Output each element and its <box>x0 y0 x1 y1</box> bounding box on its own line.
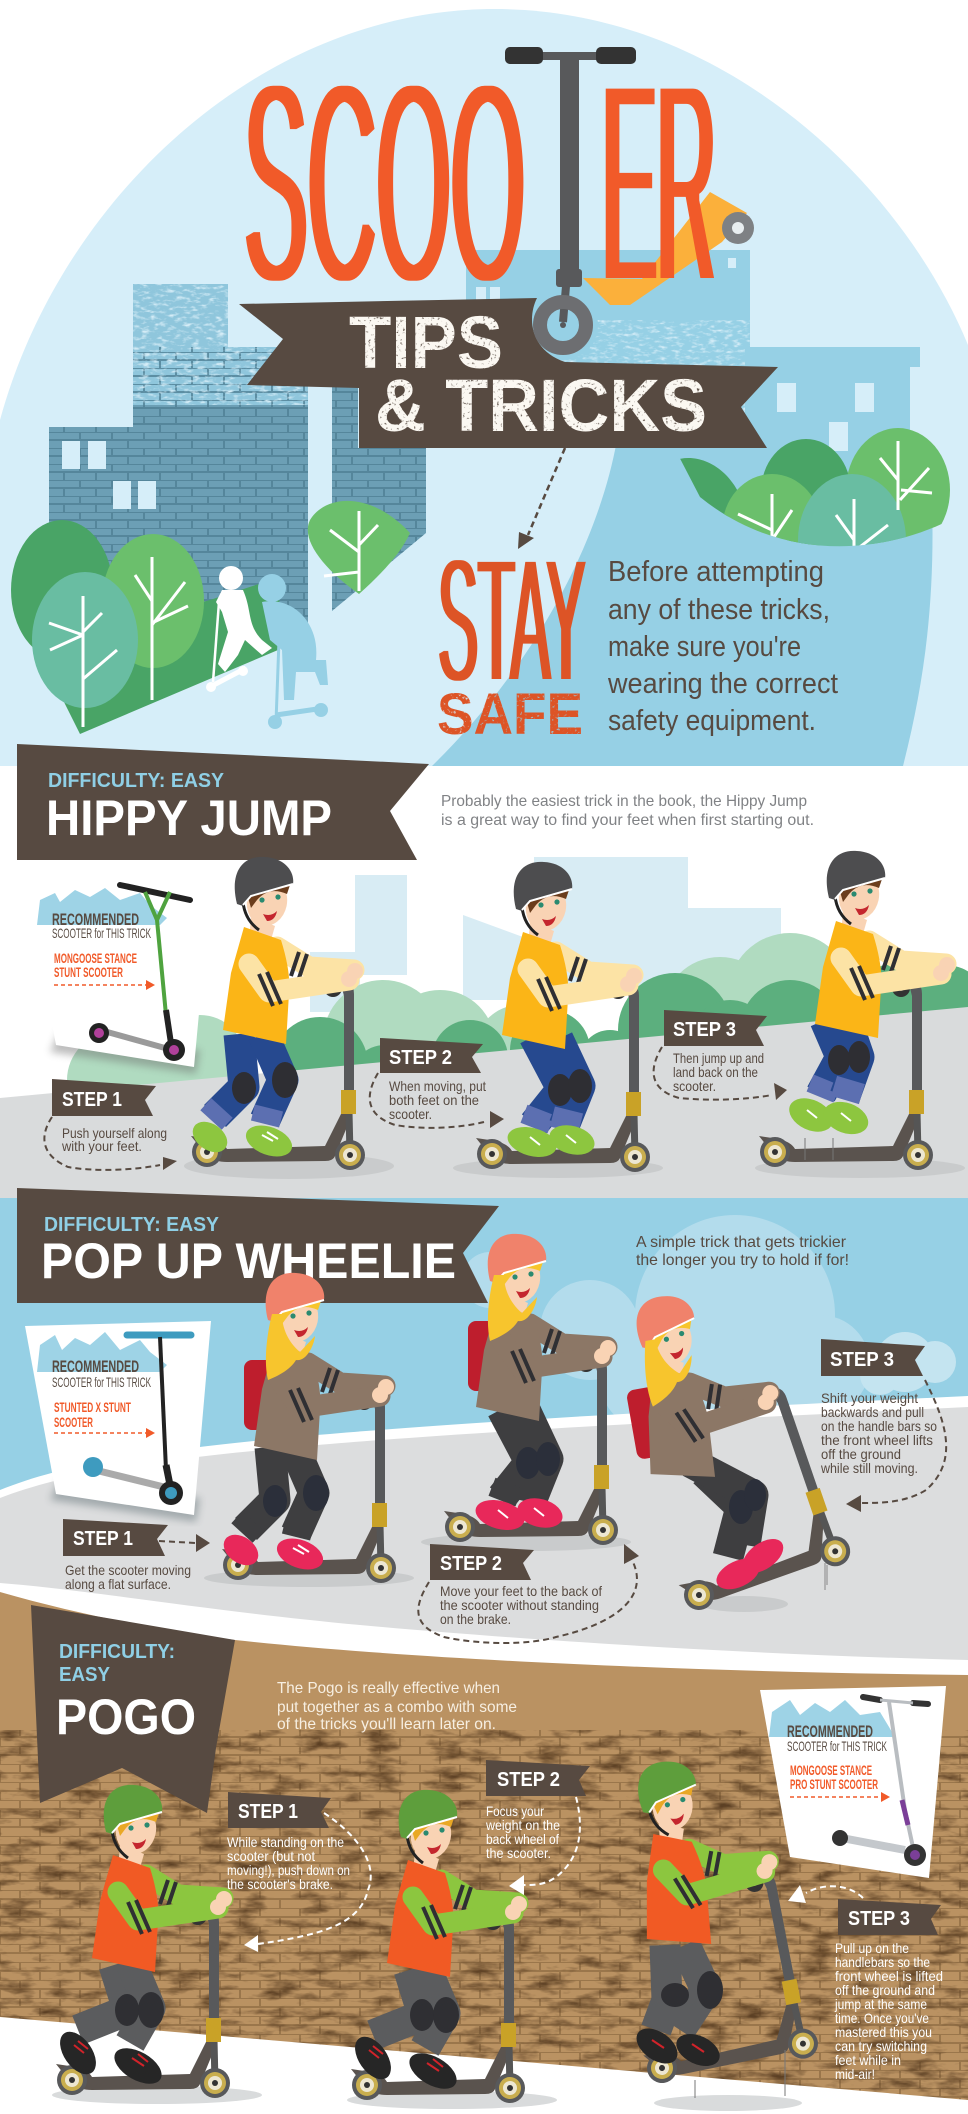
sky <box>0 1198 968 1598</box>
step 1 <box>63 1519 210 1592</box>
title: POGO <box>56 1689 196 1745</box>
trees: left group <box>11 520 280 734</box>
step 3: can try switching <box>835 2038 927 2054</box>
card: recommended scooter: MONGOOSE STANCE <box>54 950 137 966</box>
silhouette: white kid <box>206 566 272 692</box>
building: left brick tower <box>133 284 308 437</box>
card: recommended scooter: SCOOTER for THIS TRICK <box>52 1374 151 1390</box>
step 3: front wheel is lifted <box>835 1968 943 1984</box>
clouds <box>462 1215 956 1430</box>
description: A simple trick that gets trickier <box>636 1234 847 1251</box>
step 2: back wheel of <box>486 1831 559 1847</box>
step 2: the scooter without standing <box>440 1597 599 1613</box>
step 3: STEP 3 <box>673 1019 736 1041</box>
step 2: both feet on the <box>389 1092 479 1108</box>
text: safety intro: make sure you're <box>608 631 801 663</box>
step 1: While standing on the <box>227 1834 344 1850</box>
title: scooter letter T <box>505 47 754 305</box>
card: recommended scooter: SCOOTER for THIS TRICK <box>787 1738 887 1754</box>
step 1 <box>44 1079 177 1170</box>
card: recommended scooter: SCOOTER <box>54 1414 93 1430</box>
step 1: STEP 1 <box>62 1089 122 1111</box>
step 3 <box>820 1339 946 1512</box>
step 1: Push yourself along <box>62 1125 167 1141</box>
card: recommended scooter: MONGOOSE STANCE <box>790 1762 872 1778</box>
rider: step 1 <box>184 857 394 1179</box>
step 2: scooter. <box>389 1106 432 1122</box>
step 1: Get the scooter moving <box>65 1562 191 1578</box>
panel: hero section <box>0 9 968 766</box>
description <box>277 1680 517 1733</box>
rider: step 2 <box>347 1790 557 2109</box>
panel: hero section: STAY <box>438 523 586 719</box>
rider: step 3 <box>755 851 965 1178</box>
difficulty label: DIFFICULTY: EASY <box>48 770 225 792</box>
step 3: the front wheel lifts <box>821 1432 933 1448</box>
text: safety intro: any of these tricks, <box>608 594 830 626</box>
step 3: time. Once you've <box>835 2010 929 2026</box>
step 3: handlebars so the <box>835 1954 930 1970</box>
step 1: STEP 1 <box>238 1801 298 1823</box>
step 2: STEP 2 <box>497 1769 560 1791</box>
step 2: on the brake. <box>440 1611 511 1627</box>
card: recommended scooter: RECOMMENDED <box>787 1722 873 1741</box>
step 3: on the handle bars so <box>821 1418 937 1434</box>
rider: step 3 <box>613 1748 821 2111</box>
panel: pogo <box>0 1592 968 2114</box>
heading: TIPS: TIPS <box>349 301 503 384</box>
card: recommended scooter <box>25 873 212 1074</box>
description <box>636 1234 849 1269</box>
step 2 <box>370 1038 504 1128</box>
mini scooter <box>832 1697 928 1866</box>
trees: right group <box>680 428 950 546</box>
title: HIPPY JUMP <box>46 790 332 846</box>
tree: centre leaf <box>308 501 410 594</box>
sky circle <box>0 9 968 766</box>
step 2: STEP 2 <box>389 1047 452 1069</box>
difficulty label: DIFFICULTY: <box>59 1641 175 1663</box>
panel: hippy jump <box>0 744 968 1200</box>
card: recommended scooter <box>760 1686 946 1878</box>
step 2: Move your feet to the back of <box>440 1583 602 1599</box>
description: is a great way to find your feet when first starting out. <box>441 812 814 829</box>
ground <box>0 1396 968 1680</box>
text: safety intro: safety equipment. <box>608 705 816 737</box>
description: The Pogo is really effective when <box>277 1680 500 1697</box>
text: safety intro: wearing the correct <box>607 668 838 700</box>
brick wall <box>0 1592 968 2114</box>
panel: pop up wheelie <box>0 1188 968 1680</box>
card: recommended scooter: RECOMMENDED <box>52 910 139 929</box>
pavement <box>0 2017 968 2114</box>
step 1: with your feet. <box>61 1138 142 1154</box>
step 3: mastered this you <box>835 2024 932 2040</box>
building: far right <box>745 347 920 487</box>
step 2: Focus your <box>486 1803 544 1819</box>
step 2 <box>418 1544 639 1643</box>
step 1: moving!), push down on <box>227 1862 350 1878</box>
step 1: scooter (but not <box>227 1848 315 1864</box>
step 3: jump at the same <box>834 1996 927 2012</box>
step 3: feet while in <box>835 2052 901 2068</box>
description <box>441 793 814 829</box>
step 3: scooter. <box>673 1078 716 1094</box>
step 3 <box>654 1010 787 1100</box>
banner <box>17 1188 499 1303</box>
building: right upper <box>466 250 750 448</box>
description: Probably the easiest trick in the book, the Hippy Jump <box>441 793 807 810</box>
description: put together as a combo with some <box>277 1699 517 1716</box>
title: POP UP WHEELIE <box>41 1233 456 1289</box>
step 1: the scooter's brake. <box>227 1876 333 1892</box>
banner: EASY <box>59 1664 111 1686</box>
step 2: When moving, put <box>389 1078 486 1094</box>
card: recommended scooter: STUNT SCOOTER <box>54 964 123 980</box>
step 3: STEP 3 <box>830 1349 894 1371</box>
banner <box>17 744 429 860</box>
step 1 <box>227 1792 371 1952</box>
step 3: Then jump up and <box>673 1050 764 1066</box>
step 2: STEP 2 <box>440 1553 502 1575</box>
step 3: Shift your weight <box>821 1390 918 1406</box>
step 3: STEP 3 <box>848 1908 910 1930</box>
card: recommended scooter: PRO STUNT SCOOTER <box>790 1776 878 1792</box>
rider: step 3 <box>621 1279 854 1617</box>
backdrop buildings <box>310 857 781 1012</box>
scooter front wheel <box>540 269 586 348</box>
rider: step 2 <box>421 1234 631 1551</box>
rider: step 1 <box>204 1273 414 1587</box>
card: recommended scooter <box>25 1321 211 1522</box>
step 3: off the ground <box>821 1446 901 1462</box>
banner <box>31 1605 235 1813</box>
description: the longer you try to hold if for! <box>636 1252 849 1269</box>
text: safety intro: Before attempting <box>608 556 824 588</box>
step 3: mid-air! <box>835 2066 875 2082</box>
step 2: the scooter. <box>486 1845 551 1861</box>
rider: step 1 <box>52 1785 262 2104</box>
step 3: off the ground and <box>835 1982 935 1998</box>
step 3 <box>788 1885 943 2082</box>
mini scooter <box>89 885 190 1061</box>
card: recommended scooter: SCOOTER for THIS TRICK <box>52 925 151 941</box>
heading: SAFE: SAFE <box>437 682 583 747</box>
step 3: while still moving. <box>820 1460 918 1476</box>
bushes <box>67 933 968 1128</box>
difficulty label: DIFFICULTY: EASY <box>44 1214 220 1236</box>
step 1: STEP 1 <box>73 1528 133 1550</box>
description: of the tricks you'll learn later on. <box>277 1716 496 1733</box>
silhouette: blue kid <box>258 574 328 729</box>
building: left brick lower <box>49 385 426 640</box>
step 3: land back on the <box>673 1064 758 1080</box>
rider: step 2 <box>453 862 663 1178</box>
mini scooter <box>83 1335 191 1505</box>
banner: tips and tricks <box>239 269 778 448</box>
step 2: weight on the <box>485 1817 560 1833</box>
road <box>432 420 933 766</box>
ground <box>0 1007 968 1200</box>
card: recommended scooter: STUNTED X STUNT <box>54 1399 131 1415</box>
step 3: backwards and pull <box>821 1404 924 1420</box>
step 2 <box>485 1760 590 1895</box>
heading: & TRICKS: & TRICKS <box>375 364 707 447</box>
step 1: along a flat surface. <box>65 1576 171 1592</box>
text: safety intro <box>607 556 838 737</box>
step 3: Pull up on the <box>835 1940 909 1956</box>
card: recommended scooter: RECOMMENDED <box>52 1357 139 1376</box>
arrow: down to stay safe <box>518 448 565 549</box>
